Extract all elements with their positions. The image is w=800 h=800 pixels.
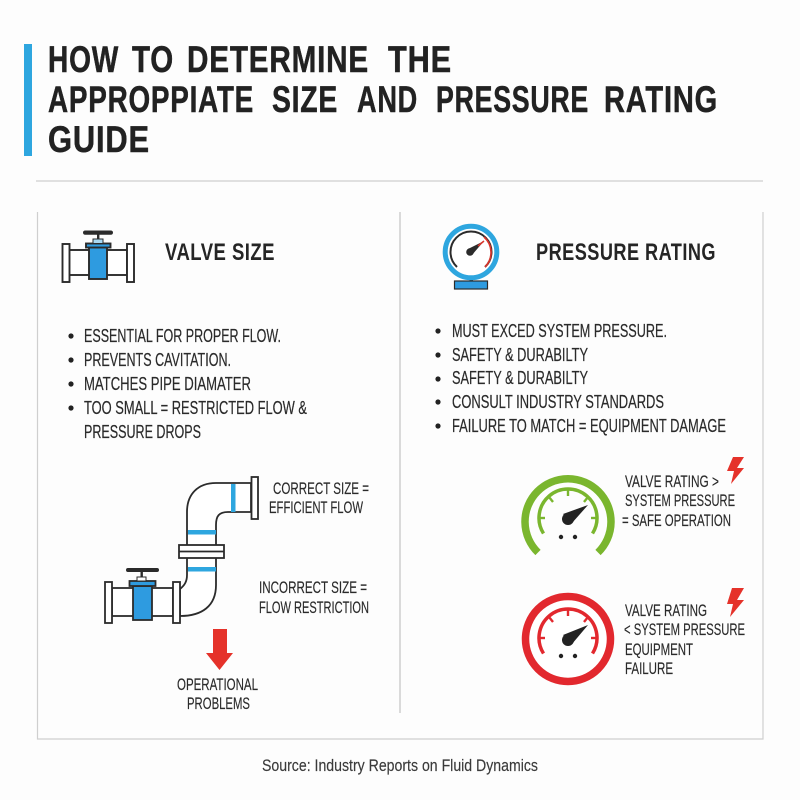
arrow: down to problems (206, 629, 233, 670)
icon: pressure gauge (445, 226, 497, 289)
label: correct size: EFFICIENT FLOW (269, 499, 363, 517)
text: equipment failure: EQUIPMENT (625, 641, 693, 659)
icon: valve (62, 230, 134, 282)
text: equipment failure: < SYSTEM PRESSURE (624, 621, 745, 639)
icon: lightning bolt red (727, 588, 744, 617)
title: PRESSURE (436, 79, 589, 120)
heading: valve size: VALVE SIZE (165, 239, 275, 266)
valve size bullet list: ESSENTIAL FOR PROPER FLOW. (84, 326, 281, 346)
icon: lightning bolt green (727, 457, 744, 484)
valve size bullet list: TOO SMALL = RESTRICTED FLOW & (84, 398, 307, 418)
pipe and valve diagram (105, 477, 369, 713)
pressure rating bullet list: SAFETY & DURABILTY (452, 345, 588, 365)
pressure rating bullet list (435, 321, 726, 436)
inline valve (105, 568, 180, 623)
title: AND (357, 79, 418, 120)
pressure rating bullet list: SAFETY & DURABILTY (452, 368, 588, 388)
text: equipment failure: FAILURE (625, 660, 673, 678)
pressure rating bullet list: MUST EXCED SYSTEM PRESSURE. (452, 321, 667, 341)
label: correct size: CORRECT SIZE = (273, 480, 369, 498)
title: HOW (48, 39, 119, 80)
pipe flanges (179, 477, 258, 558)
title accent bar (24, 44, 32, 156)
text: safe operation (622, 473, 735, 530)
title: APPROPPIATE (48, 79, 254, 120)
label: incorrect size: INCORRECT SIZE = (259, 579, 367, 597)
panel: pressure rating (435, 226, 745, 681)
text: safe operation: SYSTEM PRESSURE (625, 492, 735, 510)
pressure rating bullet list: CONSULT INDUSTRY STANDARDS (452, 392, 664, 412)
title (48, 39, 718, 160)
title: RATING (604, 79, 718, 120)
text: safe operation: = SAFE OPERATION (622, 512, 731, 530)
text: equipment failure (624, 602, 745, 678)
title: THE (388, 39, 452, 80)
label: incorrect size: FLOW RESTRICTION (259, 599, 369, 617)
text: safe operation: VALVE RATING > (625, 473, 719, 491)
source note: Source: Industry Reports on Fluid Dynamics (262, 757, 538, 775)
title: GUIDE (48, 119, 150, 160)
heading: pressure rating: PRESSURE RATING (536, 239, 716, 266)
label: operational problems: OPERATIONAL (177, 676, 258, 694)
label: incorrect size (259, 579, 369, 617)
title: TO (132, 39, 174, 80)
label: operational problems (177, 676, 258, 713)
valve size bullet list: PREVENTS CAVITATION. (84, 350, 231, 370)
title: DETERMINE (187, 39, 369, 80)
pipe flow stripes (188, 484, 236, 572)
label: operational problems: PROBLEMS (187, 695, 250, 713)
valve size bullet list (68, 326, 307, 442)
pipe elbow (180, 483, 251, 616)
label: correct size (269, 480, 369, 517)
valve size bullet list: PRESSURE DROPS (84, 422, 201, 442)
title: SIZE (272, 79, 338, 120)
valve size bullet list: MATCHES PIPE DIAMATER (84, 374, 251, 394)
panel frame (38, 212, 763, 739)
text: equipment failure: VALVE RATING (625, 602, 707, 620)
icon: green gauge (525, 479, 611, 552)
panel: valve size (62, 230, 369, 713)
icon: red gauge (526, 596, 610, 682)
